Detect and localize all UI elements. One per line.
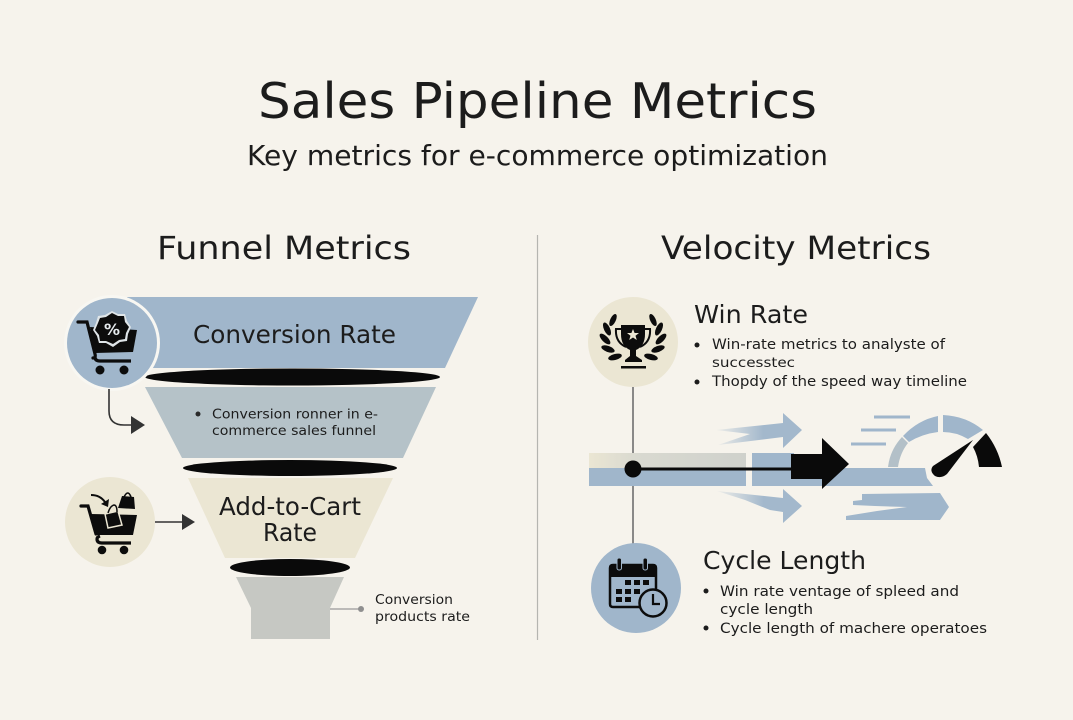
small speed arrow bottom bbox=[717, 489, 802, 523]
funnel separator ellipse 1 bbox=[145, 368, 440, 386]
funnel stage: add-to-cart rate: Add-to-Cart bbox=[219, 492, 361, 521]
timeline connector bbox=[632, 385, 634, 545]
arrow: cart to description stage bbox=[109, 389, 145, 434]
panel: velocity timeline bbox=[589, 385, 1002, 545]
funnel stage: description: Conversion ronner in e- bbox=[212, 406, 378, 422]
heading: funnel metrics: Funnel Metrics bbox=[157, 229, 411, 267]
panel: funnel bbox=[127, 297, 478, 639]
callout: conversion products rate bbox=[330, 593, 470, 625]
funnel stage: description bbox=[145, 387, 436, 458]
text block: cycle length: Cycle length of machere operatoes bbox=[720, 621, 987, 637]
text block: win rate bbox=[694, 300, 967, 390]
icon: cart with shopping bags bbox=[65, 477, 155, 567]
funnel stage: conversion rate bbox=[127, 297, 478, 368]
funnel separator ellipse 2 bbox=[183, 460, 397, 476]
text block: win rate: successtec bbox=[712, 356, 795, 371]
text block: win rate: Win Rate bbox=[694, 300, 808, 329]
text block: cycle length bbox=[703, 546, 987, 637]
funnel stage: add-to-cart rate: Rate bbox=[263, 518, 317, 547]
text block: win rate: Win-rate metrics to analyste of bbox=[712, 337, 946, 353]
large black arrow bbox=[624, 438, 849, 489]
badge: percent: % bbox=[104, 320, 120, 339]
subtitle: Key metrics for e-commerce optimization bbox=[247, 139, 828, 172]
icon: cart with percent badge bbox=[64, 295, 160, 391]
funnel stage: conversion rate: Conversion Rate bbox=[193, 320, 396, 349]
heading: velocity metrics: Velocity Metrics bbox=[661, 229, 931, 267]
arrow: cart to add-to-cart stage bbox=[155, 514, 195, 530]
text block: cycle length: cycle length bbox=[720, 602, 813, 618]
text block: cycle length: Win rate ventage of spleed and bbox=[720, 584, 959, 600]
text block: cycle length: Cycle Length bbox=[703, 546, 866, 575]
callout: conversion products rate: products rate bbox=[375, 610, 470, 625]
gauge bbox=[888, 415, 1002, 477]
small speed arrow top bbox=[716, 413, 802, 448]
speed band bbox=[589, 453, 933, 486]
bag in cart bbox=[105, 505, 122, 528]
icon: trophy with laurel bbox=[588, 297, 678, 387]
speed lines bbox=[851, 417, 910, 444]
funnel spout bbox=[236, 577, 344, 639]
funnel stage: add-to-cart rate bbox=[188, 478, 393, 558]
speed block arrow bbox=[846, 493, 949, 520]
title: Sales Pipeline Metrics bbox=[258, 73, 817, 130]
falling bag bbox=[118, 493, 135, 509]
callout: conversion products rate: Conversion bbox=[375, 593, 453, 608]
icon: calendar with clock bbox=[591, 543, 681, 633]
panel divider bbox=[536, 235, 538, 640]
funnel separator ellipse 3 bbox=[230, 559, 350, 576]
text block: win rate: Thopdy of the speed way timeline bbox=[711, 374, 967, 390]
funnel stage: description: commerce sales funnel bbox=[212, 423, 376, 439]
